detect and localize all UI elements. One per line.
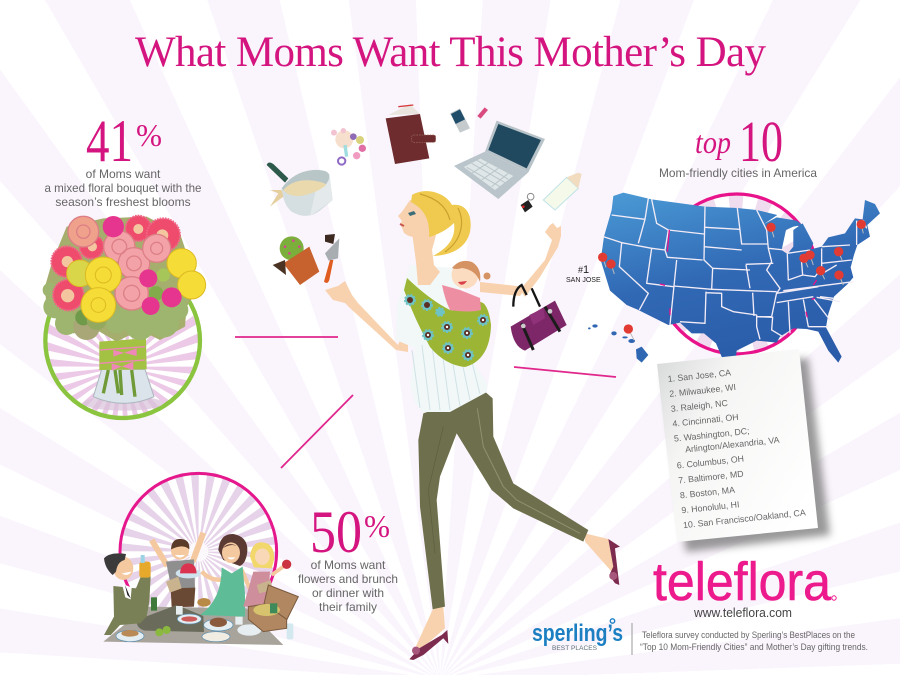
magenta carnations [103,216,182,315]
food and plates [116,597,293,642]
stat: 50% family brunch [298,499,398,614]
icon: baby rattle [331,128,366,165]
note: top 10 cities list: 4. Cincinnati, OH [672,412,739,429]
icon: flower pot [273,236,319,285]
connector line: family [281,395,353,468]
shirt [396,265,487,412]
boy [152,533,203,613]
map pins [598,220,866,340]
survey credit text [640,629,868,652]
stat: 50% family brunch: or dinner with [312,586,384,600]
icon: planner book [386,104,436,164]
heading: top 10: top [695,124,731,160]
divider [631,623,633,655]
stat: 50% family brunch: % [364,508,390,544]
stat: 50% family brunch: flowers and brunch [298,572,398,586]
label: #1 San Jose [566,264,601,284]
icon: cooking pot [267,163,333,216]
illustration: flower bouquet in vase [43,216,206,418]
logo: sperling's best places: BEST PLACES [552,645,598,652]
bouquet backing foliage [45,217,202,342]
stat: 41% floral bouquet [44,108,202,209]
stat: 41% floral bouquet: % [136,117,162,153]
legs and trousers [409,392,620,660]
note: top 10 cities list: 1. San Jose, CA [667,367,732,384]
survey credit text: Teleflora survey conducted by Sperling’s BestPlaces on the [642,629,855,640]
note: top 10 cities list [657,349,830,552]
gerbera daisies [51,216,180,310]
logo: sperling's best places: sperling’s [532,620,623,647]
daughter [243,542,291,607]
icon: phone [450,108,470,133]
baby sling [404,278,491,367]
title: What Moms Want This Mother’s Day [135,29,766,76]
note: top 10 cities list: 8. Boston, MA [679,485,736,500]
label: #1 San Jose: SAN JOSE [566,277,601,284]
stat: 41% floral bouquet: of Moms want [86,167,161,181]
picnic basket [248,585,298,632]
mother [200,534,253,617]
juggled items [267,104,582,285]
logo: sperling's best places [532,619,623,652]
handbag [511,285,567,351]
roses [68,216,171,310]
stat: 41% floral bouquet: a mixed floral bouquet with the [44,181,202,195]
state borders [603,198,867,339]
icon: lipstick [477,107,488,119]
woman juggling with baby [325,191,620,660]
hydrangea greenery [43,268,189,340]
connector line: bouquet [235,336,338,338]
note: top 10 cities list: 9. Honolulu, HI [681,499,740,515]
icon: baby bottle [543,173,582,210]
vase [93,338,154,403]
label: #1 San Jose: #1 [578,264,589,276]
left arm and hand [325,281,408,352]
connector line: map [514,367,616,377]
heading: top 10 [659,109,817,180]
head [398,200,434,237]
heading: top 10: Mom-friendly cities in America [659,166,817,180]
note: top 10 cities list: Arlington/Alexandria, VA [685,435,780,455]
hawaii islands [588,324,648,363]
raised right arm and hand [520,223,561,297]
logo: teleflora: www.teleflora.com [693,605,792,620]
heading: top 10: 10 [739,109,783,174]
note: top 10 cities list: 5. Washington, DC; [673,426,750,444]
note: top 10 cities list: 10. San Francisco/Oakland, CA [683,507,806,530]
yellow roses [67,249,206,322]
icon: garden trowel [324,234,339,283]
ring behind map [657,194,817,354]
note: top 10 cities list: 7. Baltimore, MD [678,469,744,485]
map land shape [601,193,880,366]
icon: laptop [454,121,545,199]
illustration: picnic family [103,473,298,645]
neck [412,232,440,285]
stat: 50% family brunch: of Moms want [311,558,386,572]
logo: teleflora: teleflora [653,552,832,612]
note: top 10 cities list: 2. Milwaukee, WI [669,382,736,399]
baby [442,261,526,312]
note: top 10 cities list: 6. Columbus, OH [676,454,744,471]
map: United States with pins [588,193,880,366]
stat: 50% family brunch: 50 [310,499,362,565]
blonde ponytail hair [411,191,471,256]
stat: 41% floral bouquet: season’s freshest blooms [55,195,191,209]
icon: car keys [521,193,534,212]
father [104,553,204,635]
stat: 50% family brunch: their family [319,600,377,614]
pink border accents [660,230,817,317]
picnic blanket [103,607,283,645]
note: top 10 cities list: 3. Raleigh, NC [670,398,729,414]
stat: 41% floral bouquet: 41 [86,108,133,174]
survey credit text: “Top 10 Mom-Friendly Cities” and Mother’s Day gifting trends. [640,641,868,652]
